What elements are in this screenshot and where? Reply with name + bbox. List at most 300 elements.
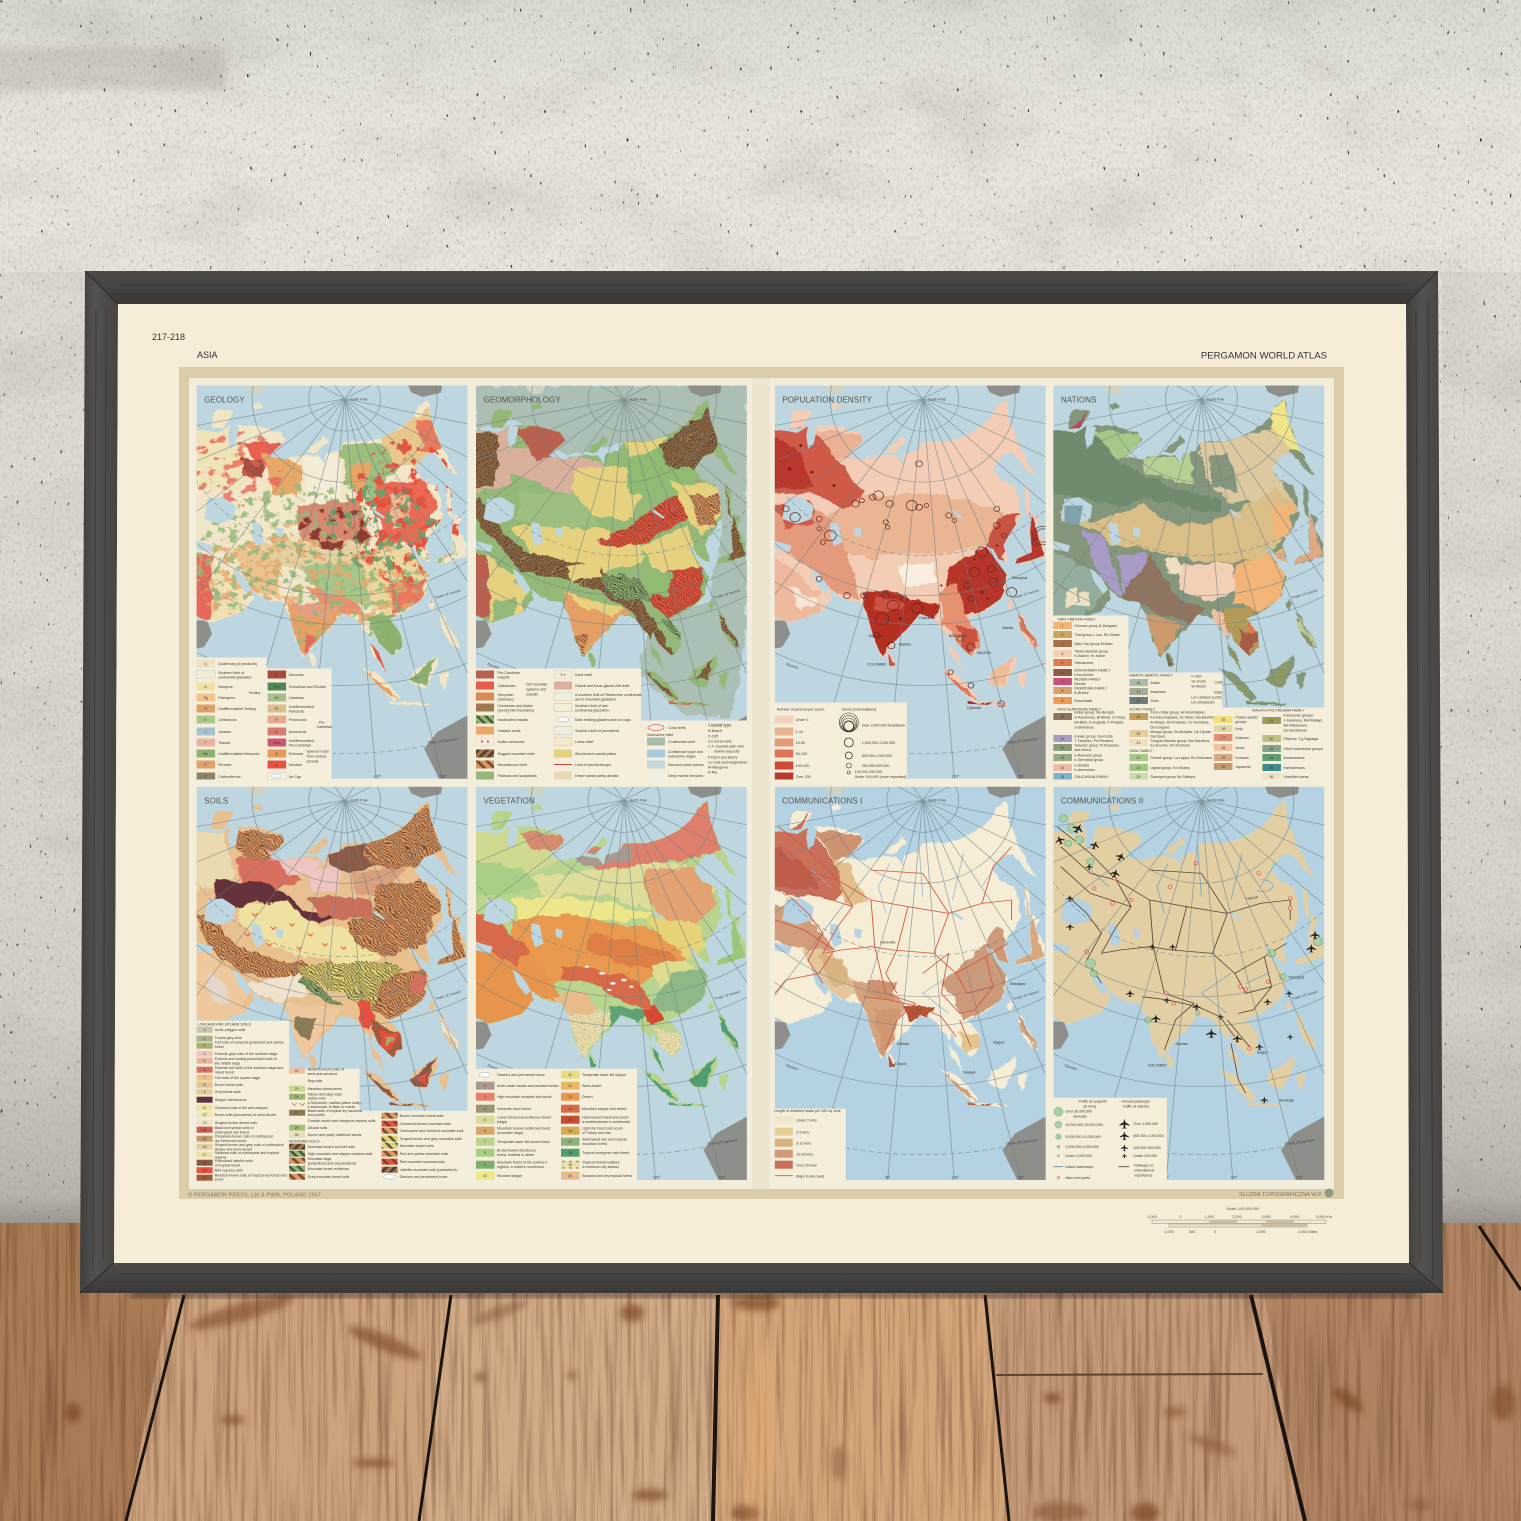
legend: nations: K-Kachin, Kr-Karen bbox=[1074, 654, 1105, 658]
legend: population density bbox=[775, 702, 907, 780]
legend: soils: Brown forest soils bbox=[215, 1083, 243, 1087]
legend: nations: 22 bbox=[1137, 756, 1140, 760]
map: communications I: Malaya bbox=[963, 1070, 975, 1074]
legend: nations: 30 bbox=[1222, 765, 1225, 769]
legend: vegetation: 12 bbox=[568, 1084, 572, 1088]
legend: vegetation: Mountain boreal coniferous forest bbox=[497, 1127, 550, 1131]
legend: geology: γ bbox=[276, 763, 278, 767]
title: communications II: COMMUNICATIONS II bbox=[1061, 797, 1143, 806]
legend: soils: 12 bbox=[203, 1113, 207, 1117]
panel: communications I bbox=[774, 786, 1046, 1180]
legend: nations: 35 bbox=[1270, 766, 1273, 770]
map: communications I: Saigon bbox=[993, 1041, 1005, 1044]
legend: soils: Brown soils (burozems) of semi-desert bbox=[215, 1113, 276, 1117]
scale bar: 500 bbox=[1189, 1230, 1195, 1234]
legend: communications I bbox=[774, 1109, 846, 1181]
legend: geomorphology: Inactivated massifs bbox=[498, 718, 528, 722]
title: geology: GEOLOGY bbox=[204, 396, 245, 404]
legend: vegetation: 7 bbox=[484, 1140, 486, 1144]
legend: geology: Mz bbox=[203, 752, 208, 756]
legend: vegetation: 5 bbox=[484, 1118, 486, 1122]
legend: vegetation: Mountain forest of the southern bbox=[497, 1161, 547, 1165]
legend: geology: Undifferentiated Tertiary bbox=[218, 707, 256, 711]
legend: communications II: annually bbox=[1073, 1115, 1087, 1119]
legend: nations: 3 bbox=[1061, 642, 1063, 646]
legend: nations: Other Indonesian groups bbox=[1283, 747, 1323, 751]
legend: soils: 19 bbox=[203, 1169, 207, 1173]
legend: geology: T bbox=[205, 741, 207, 745]
legend: soils: Takyrs and takyr soils bbox=[308, 1093, 342, 1097]
legend: geology: Permian bbox=[218, 763, 231, 767]
legend: population density: 100,000-250,000 bbox=[855, 770, 882, 774]
legend: geology: Cambrian bbox=[317, 725, 332, 729]
legend: nations: Finnish group: La-Lapps, Es-Estonians bbox=[1150, 756, 1213, 760]
legend: population density: 1,000,000-3,000,000 bbox=[862, 741, 895, 745]
legend: nations: 12 bbox=[1061, 746, 1064, 750]
legend: soils: Turf soils of the sparse taiga bbox=[215, 1076, 260, 1080]
legend: soils: 17 bbox=[203, 1153, 207, 1157]
legend: geology: Cm bbox=[274, 696, 279, 700]
map: nations bbox=[1053, 386, 1324, 728]
legend: communications II: 10,000,000-30,000,000 bbox=[1065, 1123, 1103, 1127]
legend: soils: (podzolized and unpodzolized) bbox=[308, 1162, 356, 1166]
legend: nations: groups bbox=[1235, 720, 1247, 724]
legend: nations: 34 bbox=[1270, 756, 1273, 760]
legend: geomorphology: Hercynian bbox=[498, 693, 514, 697]
paper mat bbox=[114, 304, 1409, 1263]
legend: population density: Towns (Conurbations) bbox=[841, 708, 876, 712]
legend: geomorphology: Mountainous relief bbox=[498, 763, 527, 767]
legend: nations: SINO-TIBETAN FAMILY bbox=[1057, 618, 1096, 622]
legend: nations: 31 bbox=[1270, 719, 1273, 723]
legend: geology: Q bbox=[204, 662, 207, 666]
legend: geology: Tertiary bbox=[249, 691, 261, 695]
map: communications II: Surabaja bbox=[1279, 1099, 1294, 1103]
legend: soils: the middle taiga bbox=[215, 1062, 240, 1066]
legend: nations: 25 bbox=[1222, 718, 1225, 722]
legend: geology: continental glaciation bbox=[218, 676, 252, 680]
legend: geomorphology: Karst relief bbox=[575, 673, 592, 677]
legend: geology: A bbox=[275, 730, 278, 734]
legend: soils: Grey forest soils bbox=[215, 1090, 241, 1094]
legend: soils: Podzolized lateritic soils bbox=[215, 1159, 253, 1163]
panel: population density bbox=[774, 386, 1046, 780]
legend: soils: Black and yellow soils of bbox=[215, 1126, 254, 1130]
legend: soils: Steppe chernozems bbox=[215, 1098, 247, 1102]
legend: geomorphology: Pre-Cambrian bbox=[498, 671, 520, 675]
legend: soils: forest bbox=[215, 1045, 224, 1049]
legend: nations: 24 bbox=[1137, 775, 1140, 779]
legend: geomorphology: Cimmerian and Alpine bbox=[498, 704, 533, 708]
legend: geology: Ordovician and Silurian bbox=[289, 685, 326, 689]
legend: soils: 21 bbox=[295, 1069, 299, 1073]
legend: nations: INDO-EUROPEAN FAMILY bbox=[1057, 708, 1102, 712]
panel: nations bbox=[1053, 386, 1324, 780]
legend: soils: Grey mountain forest soils bbox=[308, 1175, 350, 1179]
legend: geomorphology: Rugged mountain relief bbox=[498, 752, 535, 756]
legend: vegetation: Savanna and dry tropical forest bbox=[582, 1174, 632, 1178]
legend: geology: Proterozoic bbox=[289, 718, 307, 722]
map: geology bbox=[196, 386, 468, 779]
legend: vegetation: 13 bbox=[568, 1095, 572, 1099]
map: population density: Madras bbox=[899, 643, 911, 646]
legend: vegetation: Light dry forest and scrub bbox=[582, 1127, 623, 1131]
legend: geology: periods bbox=[307, 760, 319, 764]
legend: geology: P bbox=[204, 763, 207, 767]
legend: geomorphology: Continental shelf bbox=[668, 740, 695, 744]
legend: nations: Iranian group: Ku-Kurds, bbox=[1074, 734, 1114, 738]
map: population density: BANGKOK bbox=[949, 634, 968, 638]
legend: soils: Savanna soils of subtropical and tropical bbox=[215, 1151, 279, 1155]
legend: vegetation: 17 bbox=[568, 1140, 572, 1144]
legend: vegetation: 18 bbox=[568, 1151, 572, 1155]
panel: communications II bbox=[1053, 786, 1324, 1180]
legend: geomorphology: Caledonian bbox=[498, 684, 516, 688]
panel: soils bbox=[196, 786, 468, 1181]
legend: soils: MOUNTAIN SOILS bbox=[289, 1140, 320, 1144]
legend: geology: Undifferentiated bbox=[289, 705, 314, 709]
legend: communications II: Under 200,000 bbox=[1133, 1154, 1157, 1158]
page number: 217-218 bbox=[152, 332, 185, 342]
legend: soils: Tundra gley soils bbox=[215, 1036, 242, 1040]
legend: geomorphology: R-Ria bbox=[708, 770, 717, 774]
legend: soils: Grayish-brown desert soils bbox=[215, 1121, 257, 1125]
legend: soils: 4 bbox=[204, 1052, 206, 1056]
legend: geology: Pg bbox=[204, 696, 208, 700]
legend: nations: 4 bbox=[1061, 652, 1063, 656]
map: population density: Bombay bbox=[869, 634, 883, 638]
legend: geomorphology bbox=[476, 668, 748, 780]
legend: vegetation: 2 bbox=[484, 1084, 486, 1088]
legend: population density: Over 200 bbox=[796, 775, 811, 779]
legend: communications II: 200,000-500,000 bbox=[1133, 1146, 1161, 1150]
legend: vegetation: Subtropical rain and tropical bbox=[582, 1138, 627, 1142]
map: communications I: Alma-Ata bbox=[880, 941, 895, 944]
legend: communications I: 5-10 kms bbox=[796, 1141, 811, 1145]
legend: nations: 27 bbox=[1222, 736, 1225, 740]
legend: soils: Red mountain savanna soils bbox=[400, 1160, 445, 1164]
legend: soils: dry forest and scrub bbox=[215, 1139, 246, 1143]
legend: geomorphology: Old mountain bbox=[526, 682, 547, 686]
legend: nations: J-Javanese, Mal-Malays, bbox=[1283, 718, 1323, 722]
legend: nations: a-Greeks bbox=[1074, 764, 1089, 768]
legend: communications II: Railways of bbox=[1134, 1164, 1153, 1168]
atlas sheet border bbox=[179, 367, 1344, 1199]
legend: soils: 7 bbox=[204, 1076, 206, 1080]
legend: vegetation: 14 bbox=[568, 1107, 572, 1111]
legend: population density: Over 3,000,000 inhabitants bbox=[862, 724, 905, 728]
legend: nations: Ugrian group: Kh-Khanty bbox=[1150, 766, 1190, 770]
legend: soils: 3 bbox=[204, 1044, 206, 1048]
legend: nations: 1 bbox=[1061, 624, 1063, 628]
legend: communications I: Length of metalled roads per 100 sq. kms bbox=[774, 1109, 841, 1113]
legend: nations: 33 bbox=[1270, 747, 1273, 751]
legend: geology: Cambrian bbox=[289, 696, 304, 700]
legend: soils: subtropical rain forest bbox=[215, 1131, 249, 1135]
legend: soils: Brown mountain forest soils bbox=[400, 1114, 444, 1118]
legend: soils: regions bbox=[215, 1156, 227, 1160]
legend: vegetation: (taiga) bbox=[497, 1120, 507, 1124]
legend: nations: T-Tadzhiks, Pe-Persians bbox=[1074, 739, 1113, 743]
legend: soils bbox=[197, 1021, 469, 1182]
map: communications II: Saigon bbox=[1257, 1051, 1268, 1054]
legend: geomorphology: Plateaus and scarplands bbox=[498, 774, 537, 778]
legend: geology: Paleozoic bbox=[289, 710, 304, 714]
legend: geomorphology: and b mountain glaciation bbox=[575, 698, 616, 702]
legend: vegetation: 20 bbox=[568, 1174, 572, 1178]
legend: nations: Sc-Scots bbox=[1191, 680, 1206, 684]
legend: geomorphology: systems and bbox=[526, 688, 546, 692]
legend: geomorphology: C.F.-Coastal plain with bbox=[708, 744, 744, 748]
legend: nations: Miao-Yao group M-Miao bbox=[1074, 642, 1113, 646]
legend: geomorphology: Limit of arid landscape bbox=[575, 763, 611, 767]
map: population density: Manila bbox=[1002, 626, 1013, 630]
legend: vegetation: 9 bbox=[484, 1163, 486, 1167]
legend: nations: Assyrians bbox=[1150, 690, 1166, 694]
scale bar: 1,000 bbox=[1164, 1230, 1174, 1234]
legend: vegetation: Subarctic birch forest bbox=[497, 1107, 531, 1111]
legend: geomorphology: M-Mangrove bbox=[708, 766, 728, 770]
legend: nations: Ev-Evenks, Ol-Orochons bbox=[1150, 744, 1190, 748]
legend: geomorphology: Alluvial and coastal plains bbox=[575, 752, 616, 756]
legend: nations: Lit-Lithuanians bbox=[1191, 700, 1215, 704]
legend: population density: 250,000-500,000 bbox=[862, 764, 889, 768]
map: communications II: COLOMBO bbox=[1148, 1064, 1167, 1068]
legend: nations: B-Brahui bbox=[1074, 691, 1089, 695]
map: population density: Calcutta bbox=[919, 616, 933, 620]
map: geomorphology bbox=[476, 386, 747, 720]
legend: soils: 2 bbox=[204, 1037, 206, 1041]
legend: soils: Bog soils bbox=[308, 1079, 322, 1083]
legend: soils: of tropical forest bbox=[215, 1164, 240, 1168]
legend: nations: 15 bbox=[1061, 775, 1064, 779]
legend: nations: 10 bbox=[1061, 715, 1064, 719]
legend: soils: 29 bbox=[295, 1126, 299, 1130]
legend: vegetation: forest, leafless in winter bbox=[497, 1153, 535, 1157]
legend: nations: Kety bbox=[1235, 727, 1243, 731]
legend: nations: Samoyed group Se-Selkups bbox=[1150, 775, 1195, 779]
legend: nations: 14 bbox=[1061, 766, 1064, 770]
legend: geology: N bbox=[204, 685, 207, 689]
legend: vegetation: Wooded steppe bbox=[497, 1174, 522, 1178]
legend: nations: and others bbox=[1074, 748, 1092, 752]
legend: nations: 9 bbox=[1061, 699, 1063, 703]
legend: nations: 28 bbox=[1222, 746, 1225, 750]
panel: vegetation bbox=[476, 786, 747, 1180]
legend: geomorphology: C-Cliff bbox=[708, 734, 718, 738]
legend: vegetation: 6 bbox=[484, 1129, 486, 1133]
legend: nations: Tibeto-Burman group bbox=[1074, 650, 1108, 654]
legend: geomorphology: B-Beach bbox=[708, 729, 722, 733]
legend: geology: C bbox=[204, 774, 207, 778]
legend: communications II: traffic at airports bbox=[1123, 1105, 1149, 1109]
legend: nations: 32 bbox=[1270, 737, 1273, 741]
map: communications II: Shanghai bbox=[1288, 976, 1304, 979]
legend: nations: Turco-Tatar group: Az-Azerbaijans, bbox=[1150, 710, 1206, 714]
panel: geomorphology bbox=[476, 386, 747, 780]
legend: vegetation: Hard-leaved forest and scrub bbox=[582, 1116, 628, 1120]
scale bar: 5,000 Km bbox=[1316, 1215, 1332, 1219]
scale bar: 3,000 bbox=[1261, 1215, 1271, 1219]
legend: geomorphology: Co-Coral reefs bbox=[708, 740, 732, 744]
legend: geology bbox=[197, 658, 332, 780]
legend: geomorphology: Glacial and fluvio-glacial drift relief bbox=[575, 684, 630, 688]
legend: soils: semi-arid savanna bbox=[308, 1072, 337, 1076]
legend: vegetation: 11 bbox=[568, 1073, 572, 1077]
legend: nations: MON-KHMER FAMILY bbox=[1074, 668, 1111, 672]
legend: soils: Lateritic mountain soils (podzolized) bbox=[400, 1168, 457, 1172]
legend: geomorphology: Active volcanoes bbox=[498, 740, 525, 744]
legend: nations: Du-Dolgans bbox=[1150, 726, 1170, 730]
legend: nations: Filipinos: Tg-Tagalogs bbox=[1283, 737, 1318, 741]
legend: nations: Chinese group D-Dungans bbox=[1074, 624, 1117, 628]
legend: communications II: Under 2,000,000 bbox=[1065, 1154, 1092, 1158]
legend: nations: 16 bbox=[1137, 681, 1140, 685]
legend: nations: 11 bbox=[1061, 737, 1064, 741]
legend: nations bbox=[1053, 616, 1325, 780]
legend: geology: Pre- bbox=[319, 720, 326, 724]
legend: nations: URAL FAMILY bbox=[1129, 749, 1153, 753]
legend: soils: Chernozem and chestnut mountain soils bbox=[400, 1129, 464, 1133]
legend: nations: Ku-Kara-Kalpaks, Ta-Tatars, Ba-Bashkirs, bbox=[1150, 716, 1217, 720]
legend: nations: DRAVIDIAN FAMILY bbox=[1074, 686, 1108, 690]
map: communications I: Ceylon bbox=[895, 1062, 907, 1066]
legend: soils: Podzolic gley soils of the northern taiga bbox=[215, 1052, 277, 1056]
legend: geology: O-S bbox=[274, 685, 280, 689]
legend: nations: 21 bbox=[1137, 741, 1140, 745]
frame shadow on floor bbox=[130, 1291, 1420, 1298]
legend: vegetation: Mountain steppe and desert bbox=[582, 1107, 627, 1111]
legend: nations: Al-Altays, Kh-Khakass, Tu-Tuvinians, bbox=[1150, 720, 1209, 724]
legend: nations: 2 bbox=[1061, 633, 1063, 637]
legend: geology: Undifferentiated Mesozoic bbox=[218, 752, 260, 756]
legend: nations: Celts bbox=[1214, 680, 1223, 684]
legend: vegetation: regions: a mixed b coniferous bbox=[497, 1165, 544, 1169]
legend: geology: Intrusive bbox=[289, 763, 302, 767]
legend: geology: Quaternary (in products) bbox=[218, 662, 257, 666]
legend: nations: W-Welsh bbox=[1191, 684, 1206, 688]
legend: vegetation: Tropical forests leafless bbox=[582, 1161, 620, 1165]
legend: communications I: Over 25 kms bbox=[796, 1163, 817, 1167]
title: nations: NATIONS bbox=[1061, 396, 1097, 404]
legend: nations: b-Armenians bbox=[1074, 768, 1095, 772]
legend: soils: 9 bbox=[204, 1090, 206, 1094]
legend: soils: Black soils of tropical dry savanna bbox=[308, 1109, 362, 1113]
legend: soils: Coastal marsh and mangrove swamp soils bbox=[308, 1119, 376, 1123]
legend: vegetation: mountain forest bbox=[582, 1142, 607, 1146]
scale bar bbox=[1147, 1207, 1332, 1234]
legend: soils: scrub bbox=[215, 1178, 223, 1182]
legend: geology: R bbox=[275, 718, 278, 722]
legend: vegetation: Semi-desert bbox=[582, 1084, 601, 1088]
legend: soils: 23 bbox=[295, 1087, 299, 1091]
map: population density bbox=[774, 386, 1046, 779]
legend: geology: Pre-Cambrian bbox=[289, 744, 311, 748]
map: population density: Djakarta bbox=[967, 706, 981, 710]
legend: soils: 27 bbox=[295, 1111, 299, 1115]
legend: nations: Mongol group: Bu-Buryats, Oy-Oyrats, bbox=[1150, 730, 1212, 734]
legend: soils: Cinnamon-brown soils of subtropical bbox=[215, 1135, 273, 1139]
legend: nations: Thai group L-Lao, Sh-Shans bbox=[1074, 633, 1120, 637]
legend: geology: D bbox=[275, 673, 278, 677]
scale bar: 1,000 bbox=[1205, 1215, 1214, 1219]
legend: geomorphology: Coral reefs bbox=[668, 726, 686, 730]
legend: soils: b solonchak, lb flake or marsh bbox=[308, 1105, 355, 1109]
legend: geology: Undifferentiated bbox=[289, 739, 314, 743]
legend: soils: 24 bbox=[295, 1095, 299, 1099]
legend: nations: 6 bbox=[1061, 671, 1063, 675]
legend: nations: Burushaski bbox=[1074, 699, 1092, 703]
legend: soils: 13 bbox=[203, 1121, 207, 1125]
legend: nations: Halmaherans bbox=[1283, 766, 1305, 770]
legend: geology: Neogene bbox=[218, 685, 233, 689]
legend: soils: LOWLAND AND UPLAND SOILS bbox=[198, 1023, 252, 1027]
legend: nations: 26 bbox=[1222, 727, 1225, 731]
legend: communications II: Over 1,000,000 bbox=[1133, 1122, 1158, 1126]
legend: nations: Balts bbox=[1214, 690, 1223, 694]
legend: nations: Indonesian groups: bbox=[1283, 714, 1314, 718]
scale bar: 2,000 Miles bbox=[1298, 1230, 1318, 1234]
legend: soils: Saline soils bbox=[308, 1097, 326, 1101]
legend: communications I: 2-5 kms bbox=[796, 1130, 809, 1134]
legend: nations: HAMITO-SEMITIC FAMILY bbox=[1129, 674, 1173, 678]
legend: nations: Da-Dauri bbox=[1150, 734, 1165, 738]
legend: communications II: international bbox=[1134, 1169, 1154, 1173]
legend: nations: Khm-Khmer bbox=[1074, 673, 1094, 677]
legend: communications I: 10-25 kms bbox=[796, 1152, 813, 1156]
legend: nations: 13 bbox=[1061, 756, 1064, 760]
legend: soils: 20 bbox=[203, 1176, 207, 1180]
map: population density: COLOMBO bbox=[867, 663, 886, 666]
background: wooden floor bbox=[0, 1223, 1521, 1521]
legend: vegetation: Glaciers and permanent snow bbox=[497, 1073, 545, 1077]
panel: geology bbox=[196, 386, 468, 780]
title: soils: SOILS bbox=[204, 797, 228, 806]
legend: soils: Reddish-brown soils of bbox=[308, 1068, 344, 1072]
legend: soils: 15 bbox=[203, 1137, 207, 1141]
legend: nations: Let-Latvians (Letts) bbox=[1191, 696, 1222, 700]
legend: nations: Koreans bbox=[1235, 756, 1249, 760]
legend: vegetation: Temperate lower fell mixed forest bbox=[497, 1140, 550, 1144]
legend: nations: S-Sinhalese bbox=[1074, 726, 1094, 730]
legend: geology: Extrusive bbox=[289, 752, 303, 756]
legend: nations: 36 bbox=[1270, 775, 1273, 779]
legend: nations: 5 bbox=[1061, 661, 1063, 665]
legend: communications II: Annual passenger bbox=[1121, 1100, 1151, 1104]
legend: nations: 7 bbox=[1061, 680, 1063, 684]
legend: nations: Munda bbox=[1074, 682, 1085, 686]
legend: geomorphology: V V bbox=[560, 673, 566, 677]
legend: geomorphology: continental glaciation bbox=[575, 708, 609, 712]
legend: communications II bbox=[1053, 1098, 1167, 1181]
copyright line: © PERGAMON PRESS, Ltd & PWN, POLAND 1967 bbox=[188, 1192, 321, 1198]
scale bar: Scale 1:80,000,000 bbox=[1227, 1207, 1259, 1211]
legend: communications II: 5,000,000-10,000,000 bbox=[1065, 1135, 1101, 1139]
legend: geology: K bbox=[204, 718, 207, 722]
legend: geomorphology: (Variscan) bbox=[498, 698, 514, 702]
legend: soils: 8 bbox=[204, 1083, 206, 1087]
map: population density: SAIGON bbox=[976, 651, 991, 655]
legend: geomorphology: F-Fjord and skerry bbox=[708, 756, 738, 760]
legend: population density: 500,000-1,000,000 bbox=[862, 754, 892, 758]
legend: soils: Turf soils of subarctic grassland and sparse bbox=[215, 1041, 284, 1045]
map: communications II: Madras bbox=[1176, 1042, 1188, 1046]
legend: geomorphology: Continental slope and bbox=[668, 750, 703, 754]
map: communications II bbox=[1053, 786, 1324, 1180]
legend: population density: 10-50 bbox=[796, 741, 805, 745]
legend: nations: 19 bbox=[1137, 715, 1140, 719]
legend: vegetation: Temperate lower fell steppe bbox=[582, 1073, 626, 1077]
